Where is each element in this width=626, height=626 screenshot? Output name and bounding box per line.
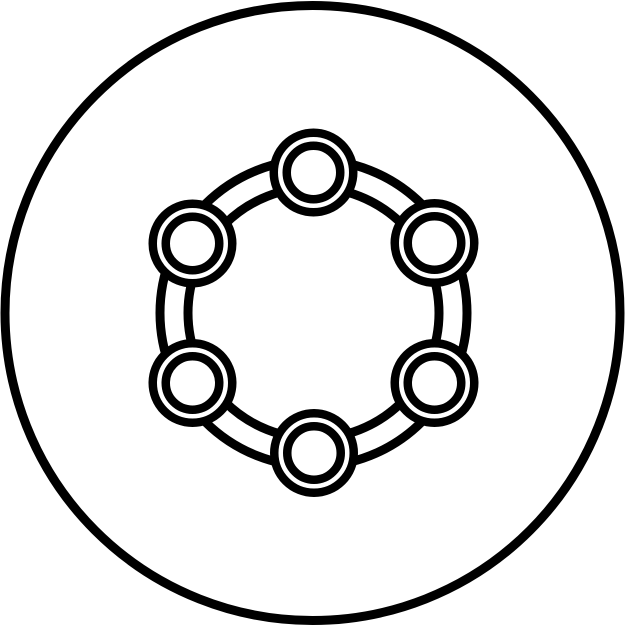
node: upper left [153,204,232,283]
node: bottom [274,413,354,493]
node: top [274,133,353,212]
node: lower right [395,343,474,423]
hexagonal ring band [160,160,467,466]
node: lower left [153,343,232,423]
node: upper right [395,203,474,283]
